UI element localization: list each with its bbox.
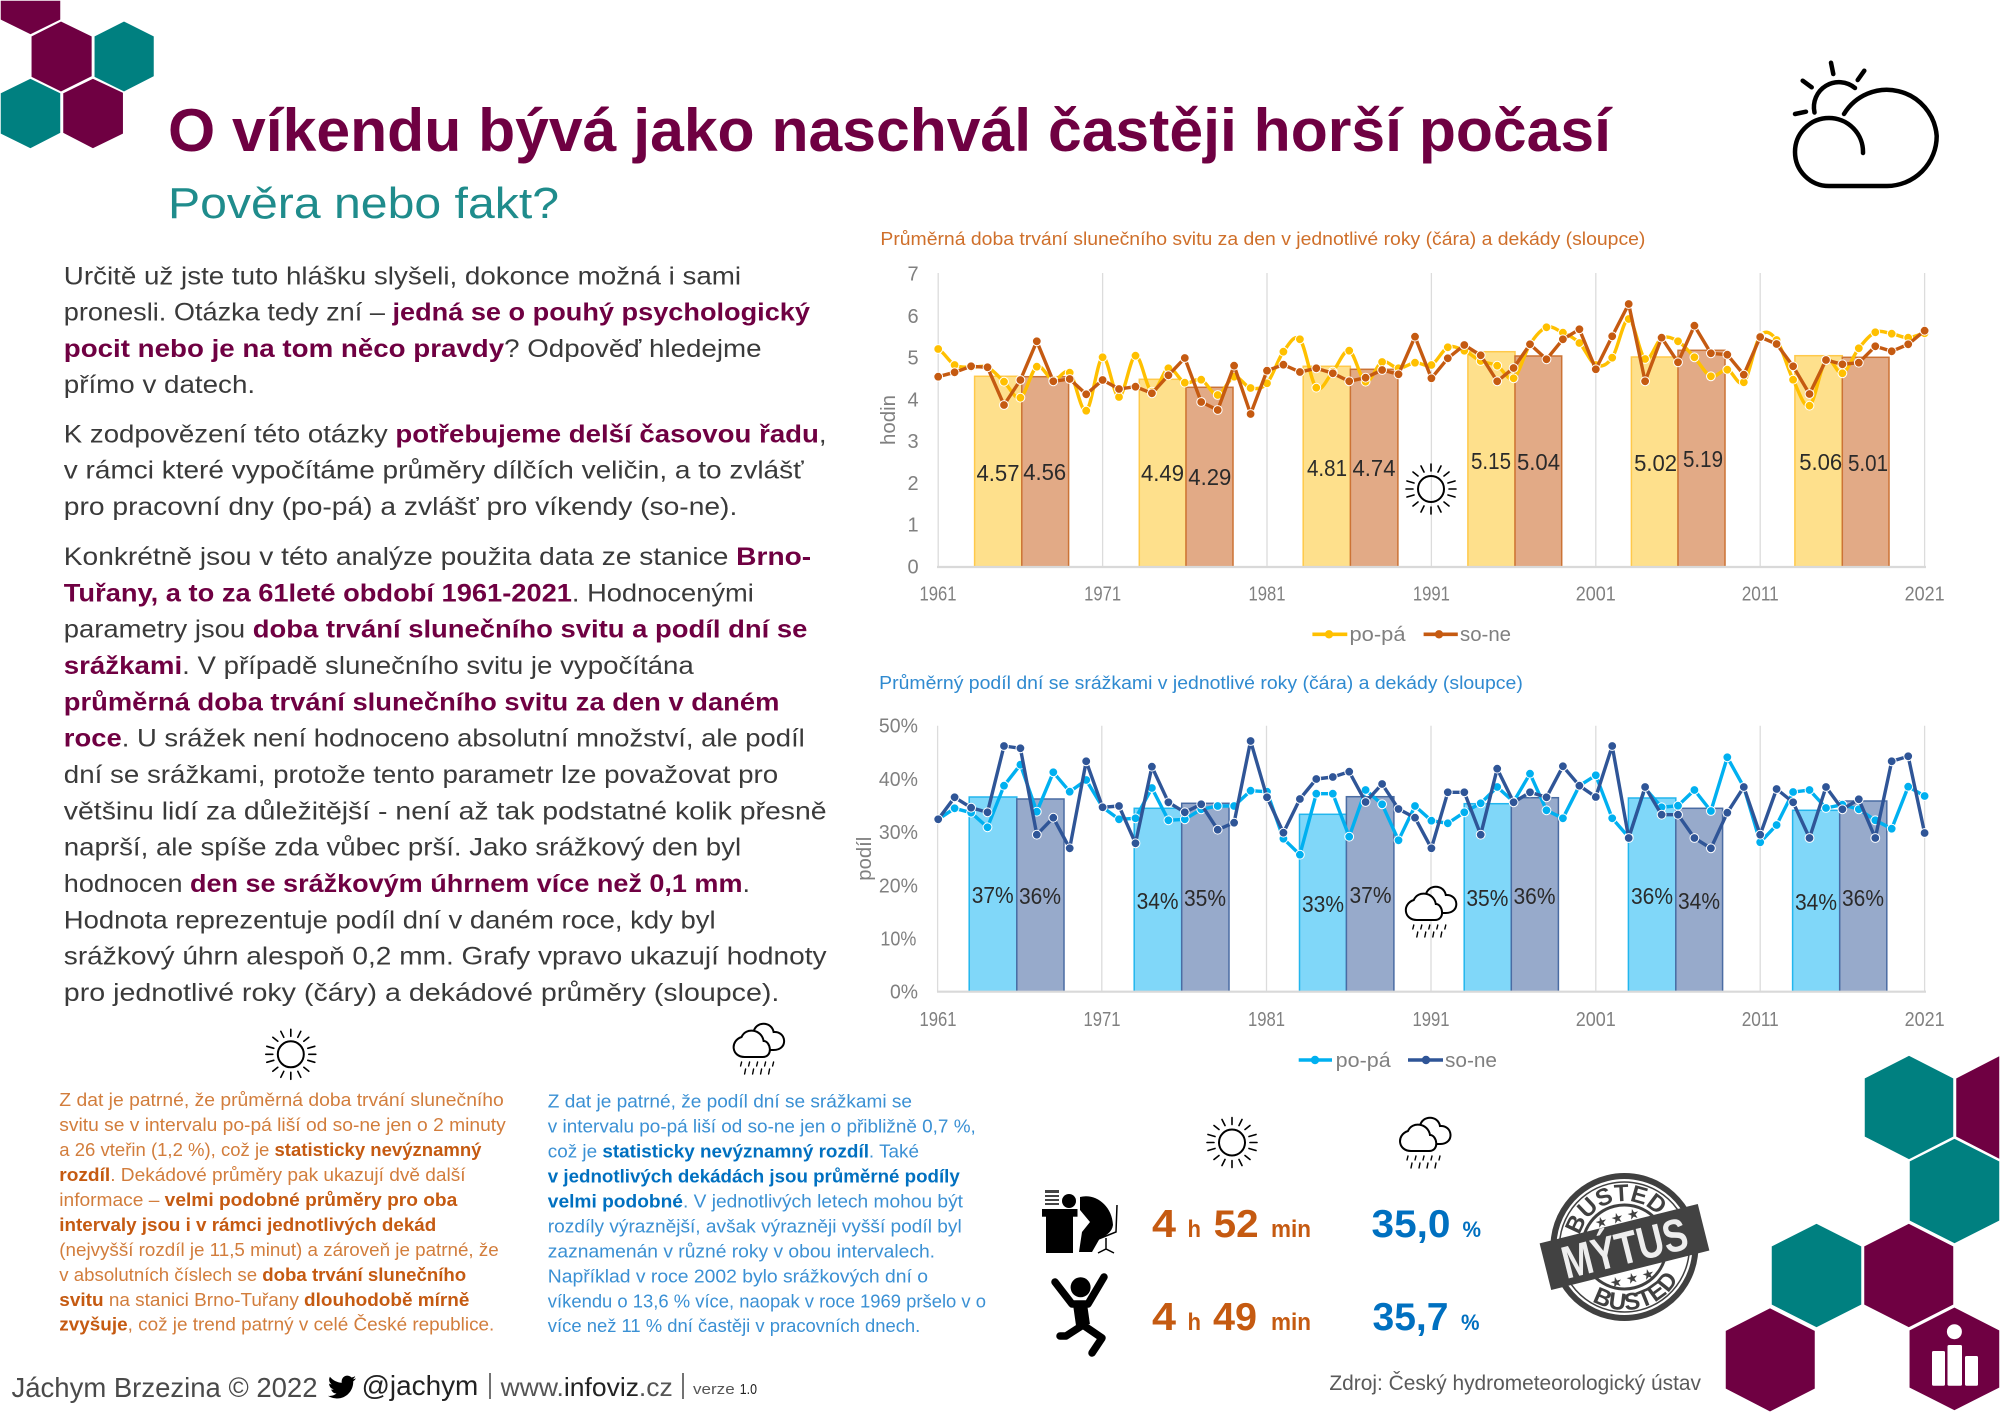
data labels: sunshine: 4.56 bbox=[1023, 459, 1066, 485]
panel: sunshine chart bbox=[878, 228, 1945, 646]
legend: precipitation: so-ne bbox=[1445, 1050, 1497, 1072]
title: O víkendu bývá jako naschvál častěji horší počasí bbox=[168, 97, 1613, 164]
paragraph 1 bbox=[64, 262, 810, 399]
axis labels: precipitation: 10% bbox=[880, 928, 917, 950]
value: sunshine weekdays: 52 bbox=[1214, 1203, 1259, 1246]
data labels: precipitation: 34% bbox=[1795, 889, 1837, 915]
text block: sunshine commentary: svitu se v intervalu po-pá liší od so-ne jen o 2 minuty bbox=[59, 1114, 506, 1135]
value: sunshine weekdays: 4 bbox=[1152, 1203, 1176, 1246]
data labels: precipitation: 36% bbox=[1842, 885, 1884, 911]
text block: precipitation commentary: v jednotlivých dekádách jsou průměrné podíly bbox=[548, 1166, 961, 1187]
icon: rain cloud column header bbox=[1400, 1118, 1451, 1168]
data labels: sunshine: 5.04 bbox=[1517, 449, 1560, 475]
data labels: precipitation: 34% bbox=[1678, 888, 1720, 914]
text block: precipitation commentary: víkendu o 13,6 % více, naopak v roce 1969 pršelo v o bbox=[548, 1291, 986, 1312]
axis labels: sunshine: 4 bbox=[907, 389, 919, 411]
footer: author and links: www.infoviz.cz bbox=[500, 1372, 673, 1402]
paragraph 3: pro jednotlivé roky (čáry) a dekádové průměry (sloupce). bbox=[64, 979, 779, 1007]
legend: precipitation bbox=[1299, 1050, 1497, 1072]
stamp: busted myth: BUSTED bbox=[1593, 1273, 1675, 1310]
stamp: busted myth: ★ ★ ★ bbox=[1608, 1265, 1656, 1291]
panel: summary numbers bbox=[1042, 1118, 1481, 1353]
axis labels: sunshine: 0 bbox=[907, 557, 919, 579]
text block: sunshine commentary: Z dat je patrné, že průměrná doba trvání slunečního bbox=[59, 1089, 504, 1110]
axis labels: sunshine: hodin bbox=[878, 395, 900, 445]
text block: sunshine commentary: intervaly jsou i v rámci jednotlivých dekád bbox=[59, 1214, 436, 1235]
axis labels: sunshine: 3 bbox=[907, 431, 919, 453]
paragraph 2 bbox=[64, 421, 827, 521]
value: sunshine weekends bbox=[1152, 1296, 1311, 1339]
data labels: sunshine: 5.01 bbox=[1848, 450, 1888, 476]
text block: precipitation commentary: v intervalu po-pá liší od so-ne jen o přibližně 0,7 %, bbox=[548, 1116, 976, 1137]
decade bars: precipitation bbox=[969, 797, 1887, 992]
value: sunshine weekdays: h bbox=[1188, 1216, 1201, 1243]
stamp: busted myth bbox=[1540, 1173, 1710, 1321]
icon: sun behind cloud bbox=[1795, 63, 1937, 186]
value: precipitation weekends: 35,7 bbox=[1372, 1296, 1448, 1339]
paragraph 3: průměrná doba trvání slunečního svitu za den v daném bbox=[64, 688, 779, 716]
chart title: sunshine: Průměrná doba trvání slunečního svitu za den v jednotlivé roky (čára) a dekády (sloupce) bbox=[880, 228, 1645, 249]
value: precipitation weekdays bbox=[1372, 1203, 1481, 1246]
value: precipitation weekdays: % bbox=[1462, 1217, 1481, 1242]
icon: jumping person bbox=[1055, 1277, 1104, 1353]
axis labels: precipitation: 1961 bbox=[920, 1009, 956, 1031]
data labels: precipitation: 35% bbox=[1466, 885, 1508, 911]
data labels: precipitation: 36% bbox=[1019, 883, 1061, 909]
text block: sunshine commentary: v absolutních číslech se doba trvání slunečního bbox=[59, 1264, 466, 1285]
data labels: sunshine: 4.81 bbox=[1307, 455, 1347, 481]
chart title: precipitation: Průměrný podíl dní se srážkami v jednotlivé roky (čára) a dekády (sloupce) bbox=[879, 672, 1523, 693]
text block: precipitation commentary: více než 11 % dní častěji v pracovních dnech. bbox=[548, 1315, 920, 1336]
axis labels: sunshine: 1981 bbox=[1248, 584, 1286, 606]
text block: sunshine commentary: rozdíl. Dekádové průměry pak ukazují dvě další bbox=[59, 1164, 466, 1185]
axis labels: sunshine: 1961 bbox=[920, 584, 956, 606]
icon: sun in chart bbox=[1406, 464, 1456, 514]
value: precipitation weekends: % bbox=[1461, 1310, 1480, 1335]
footer: author and links: verze bbox=[693, 1381, 735, 1398]
icon: rain cloud above commentary bbox=[734, 1024, 784, 1074]
data labels: precipitation: 33% bbox=[1302, 891, 1344, 917]
hexagons: bottom-right decoration bbox=[1725, 1055, 2000, 1412]
axis labels: precipitation: 50% bbox=[879, 716, 918, 738]
data labels: precipitation: 36% bbox=[1631, 883, 1673, 909]
data labels: sunshine: 4.49 bbox=[1141, 460, 1184, 486]
text block: introduction bbox=[64, 262, 827, 1007]
text block: precipitation commentary: Například v roce 2002 bylo srážkových dní o bbox=[548, 1266, 928, 1287]
axis labels: sunshine: 1971 bbox=[1084, 584, 1121, 606]
axis labels: sunshine: 2011 bbox=[1742, 584, 1779, 606]
paragraph 3: Tuřany, a to za 61leté období 1961-2021 . Hodnocenými bbox=[64, 579, 754, 607]
axis labels: precipitation: podíl bbox=[854, 837, 876, 881]
axis labels: sunshine: 2001 bbox=[1576, 584, 1616, 606]
paragraph 3: dní se srážkami, protože tento parametr lze považovat pro bbox=[64, 761, 778, 789]
value: sunshine weekdays bbox=[1152, 1203, 1311, 1246]
text block: sunshine commentary: informace – velmi podobné průměry pro oba bbox=[59, 1189, 458, 1210]
axis labels: precipitation: 0% bbox=[890, 982, 918, 1004]
value: sunshine weekends: 4 bbox=[1152, 1296, 1176, 1339]
paragraph 3: Hodnota reprezentuje podíl dní v daném roce, kdy byl bbox=[64, 906, 716, 934]
legend: sunshine: po-pá bbox=[1350, 624, 1406, 646]
source: Zdroj: Český hydrometeorologický ústav bbox=[1329, 1372, 1701, 1395]
data labels: sunshine: 4.74 bbox=[1352, 455, 1396, 481]
line: so-ne sunshine bbox=[938, 304, 1925, 414]
paragraph 3: roce. U srážek není hodnoceno absolutní množství, ale podíl bbox=[64, 725, 805, 753]
value: sunshine weekends: min bbox=[1271, 1309, 1311, 1336]
paragraph 1: pronesli. Otázka tedy zní – jedná se o pouhý psychologický bbox=[64, 299, 810, 327]
icon: sun column header bbox=[1207, 1118, 1257, 1168]
icon: twitter bird bbox=[328, 1376, 356, 1398]
text block: precipitation commentary: zaznamenán v různé roky v obou intervalech. bbox=[548, 1241, 935, 1262]
axis labels: precipitation: 30% bbox=[879, 822, 918, 844]
data labels: sunshine: 5.15 bbox=[1471, 448, 1511, 474]
axis labels: sunshine: 5 bbox=[907, 348, 919, 370]
axis labels: sunshine bbox=[878, 263, 1945, 606]
paragraph 1: přímo v datech. bbox=[64, 371, 255, 399]
paragraph 3 bbox=[64, 543, 827, 1007]
line: po-pá sunshine bbox=[938, 319, 1925, 411]
text block: sunshine commentary: zvyšuje, což je trend patrný v celé České republice. bbox=[59, 1314, 494, 1334]
stamp: busted myth: MÝTUS bbox=[1556, 1207, 1693, 1289]
data labels: precipitation: 37% bbox=[1350, 882, 1392, 908]
paragraph 3: hodnocen den se srážkovým úhrnem více než 0,1 mm . bbox=[64, 870, 750, 898]
text block: sunshine commentary: a 26 vteřin (1,2 %), což je statisticky nevýznamný bbox=[59, 1139, 482, 1160]
axis labels: precipitation: 2011 bbox=[1742, 1009, 1779, 1031]
paragraph 1: pocit nebo je na tom něco pravdy ? Odpověď hledejme bbox=[64, 335, 762, 363]
paragraph 3: parametry jsou doba trvání slunečního svitu a podíl dní se bbox=[64, 616, 807, 644]
paragraph 3: srážkami . V případě slunečního svitu je vypočítána bbox=[64, 652, 694, 680]
paragraph 2: K zodpovězení této otázky potřebujeme delší časovou řadu , bbox=[64, 421, 827, 449]
axis labels: precipitation: 2001 bbox=[1576, 1009, 1616, 1031]
value: sunshine weekends: 49 bbox=[1213, 1296, 1257, 1339]
paragraph 2: v rámci které vypočítáme průměry dílčích veličin, a to zvlášť bbox=[64, 457, 804, 485]
data labels: sunshine: 4.57 bbox=[976, 460, 1020, 486]
text block: sunshine commentary: svitu na stanici Brno-Tuřany dlouhodobě mírně bbox=[59, 1289, 469, 1310]
axis labels: sunshine: 6 bbox=[907, 306, 919, 328]
paragraph 3: srážkový úhrn alespoň 0,2 mm. Grafy vpravo ukazují hodnoty bbox=[64, 943, 827, 971]
axis labels: sunshine: 1991 bbox=[1413, 584, 1450, 606]
axis labels: precipitation: 20% bbox=[879, 875, 918, 897]
paragraph 3: Konkrétně jsou v této analýze použita data ze stanice Brno- bbox=[64, 543, 811, 571]
text block: precipitation commentary: Z dat je patrné, že podíl dní se srážkami se bbox=[548, 1091, 912, 1112]
footer: author and links bbox=[12, 1370, 757, 1403]
text block: precipitation commentary bbox=[548, 1091, 986, 1336]
data labels: sunshine bbox=[976, 446, 1888, 490]
panel: precipitation chart bbox=[854, 672, 1945, 1072]
axis labels: precipitation: 1971 bbox=[1084, 1009, 1120, 1031]
stamp: busted myth: ★ ★ ★ bbox=[1593, 1205, 1641, 1231]
axis labels: precipitation bbox=[854, 716, 1945, 1031]
data labels: precipitation: 37% bbox=[972, 882, 1014, 908]
legend: sunshine: so-ne bbox=[1460, 624, 1511, 646]
data labels: sunshine: 5.02 bbox=[1634, 450, 1677, 476]
legend: sunshine bbox=[1312, 624, 1511, 646]
value: sunshine weekdays: min bbox=[1271, 1216, 1311, 1243]
icon: sun above commentary bbox=[266, 1029, 316, 1079]
text block: precipitation commentary: což je statisticky nevýznamný rozdíl . Také bbox=[548, 1141, 919, 1162]
paragraph 3: naprší, ale spíše zda vůbec prší. Jako srážkový den byl bbox=[64, 834, 741, 862]
axis labels: sunshine: 7 bbox=[907, 263, 919, 285]
line: po-pá precipitation bbox=[938, 757, 1925, 855]
footer: author and links: @jachym bbox=[362, 1370, 478, 1401]
icon: person working at desk bbox=[1042, 1190, 1117, 1253]
line: so-ne precipitation bbox=[938, 741, 1925, 848]
icon: rain cloud in chart bbox=[1406, 887, 1456, 937]
axis labels: precipitation: 1981 bbox=[1248, 1009, 1285, 1031]
data labels: precipitation: 36% bbox=[1514, 883, 1556, 909]
text block: precipitation commentary: velmi podobné. V jednotlivých letech mohou být bbox=[548, 1191, 963, 1212]
axis labels: sunshine: 2 bbox=[907, 473, 919, 495]
axis labels: precipitation: 1991 bbox=[1412, 1009, 1450, 1031]
axis labels: precipitation: 40% bbox=[879, 769, 918, 791]
stamp: busted myth: BUSTED bbox=[1564, 1184, 1665, 1234]
value: sunshine weekends: h bbox=[1188, 1309, 1201, 1336]
footer: author and links: 1.0 bbox=[740, 1381, 757, 1398]
axis labels: precipitation: 2021 bbox=[1905, 1009, 1945, 1031]
footer: author and links: Jáchym Brzezina © 2022 bbox=[12, 1372, 318, 1403]
data labels: sunshine: 5.19 bbox=[1683, 446, 1723, 472]
value: precipitation weekdays: 35,0 bbox=[1372, 1203, 1450, 1246]
decade bars: sunshine bbox=[975, 350, 1889, 567]
data labels: sunshine: 4.29 bbox=[1188, 464, 1231, 490]
data labels: precipitation: 35% bbox=[1184, 885, 1226, 911]
paragraph 2: pro pracovní dny (po-pá) a zvlášť pro víkendy (so-ne). bbox=[64, 493, 737, 521]
paragraph 1: Určitě už jste tuto hlášku slyšeli, dokonce možná i sami bbox=[64, 262, 741, 290]
hexagons: top-left decoration bbox=[0, 0, 154, 149]
data labels: sunshine: 5.06 bbox=[1799, 449, 1842, 475]
axis labels: sunshine: 2021 bbox=[1905, 584, 1945, 606]
legend: precipitation: po-pá bbox=[1336, 1050, 1392, 1072]
data labels: precipitation: 34% bbox=[1137, 888, 1179, 914]
subtitle: Pověra nebo fakt? bbox=[168, 179, 559, 228]
icon: infoviz person with bars bbox=[1932, 1324, 1978, 1386]
text block: sunshine commentary: (nejvyšší rozdíl je 11,5 minut) a zároveň je patrné, že bbox=[59, 1239, 499, 1260]
data labels: precipitation bbox=[972, 882, 1884, 917]
text block: sunshine commentary bbox=[59, 1089, 506, 1334]
paragraph 3: většinu lidí za důležitější - není až tak podstatné kolik přesně bbox=[64, 797, 827, 825]
text block: precipitation commentary: rozdíly výraznější, avšak výrazněji vyšší podíl byl bbox=[548, 1216, 962, 1237]
axis labels: sunshine: 1 bbox=[907, 515, 919, 537]
